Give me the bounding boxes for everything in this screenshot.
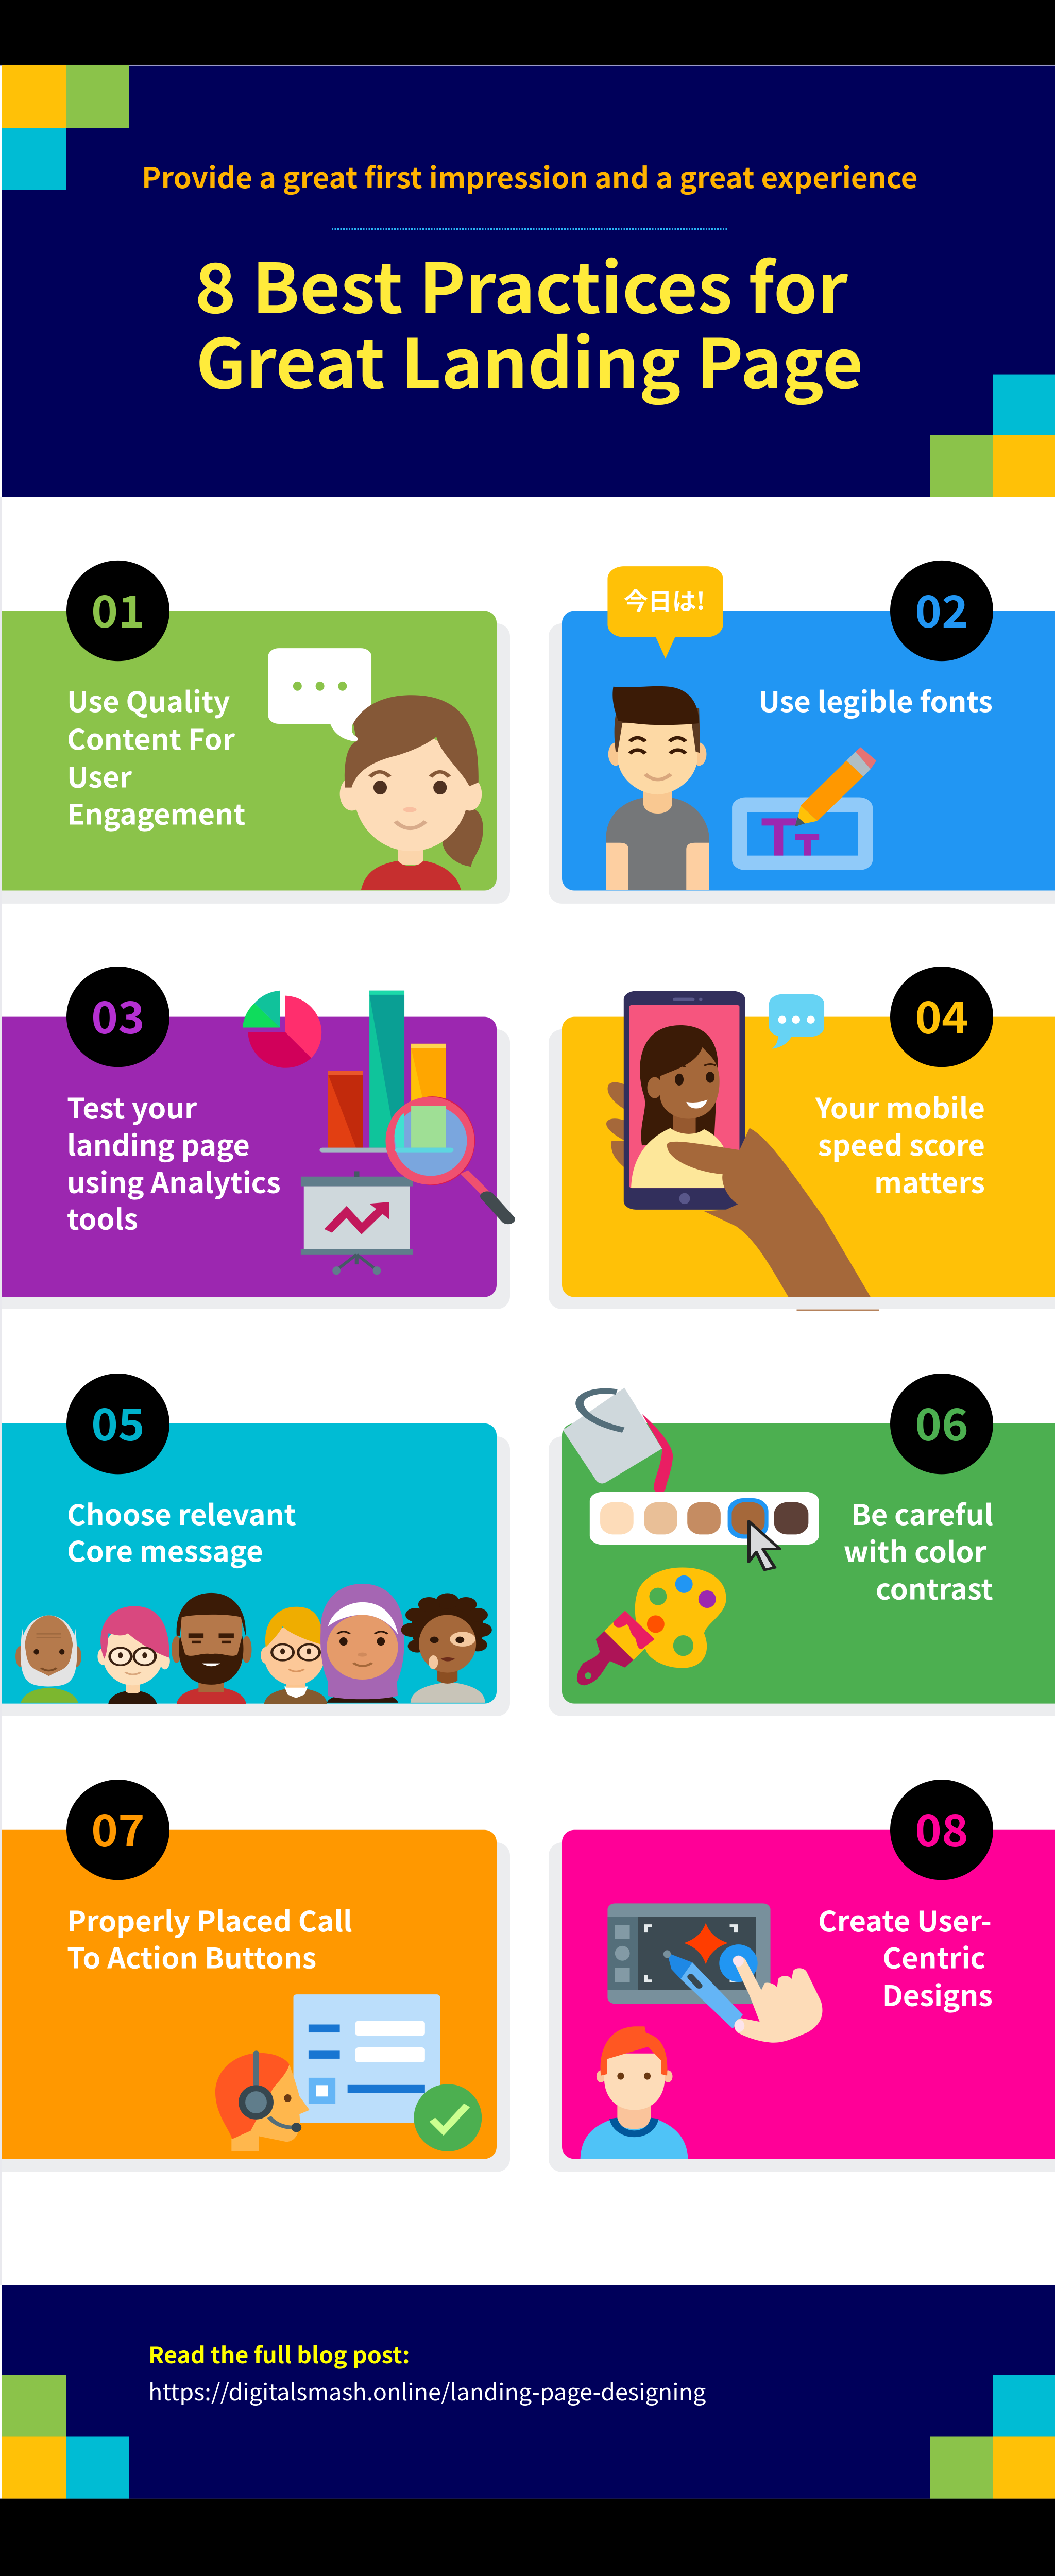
panel: 06 color contrast	[549, 1374, 1055, 1716]
illustration: charts, magnifier and board	[243, 991, 508, 1275]
text: test your landing page: Test your	[67, 1086, 197, 1127]
number badge 03: 03	[91, 982, 145, 1047]
number badge 06: 06	[915, 1389, 968, 1454]
illustration: row of diverse people	[15, 1584, 492, 1704]
number badge 01	[66, 561, 169, 661]
text: use quality content: Content For	[67, 717, 235, 758]
footer heading: Read the full blog post:	[148, 2337, 410, 2370]
number badge 07	[66, 1780, 169, 1880]
number badge 08: 08	[915, 1795, 968, 1860]
footer banner	[2, 2285, 1055, 2499]
text: user-centric designs: Centric	[882, 1936, 985, 1976]
number badge 04: 04	[915, 982, 968, 1047]
number badge 01: 01	[91, 577, 145, 640]
text: core message: Choose relevant	[67, 1493, 296, 1533]
title: Great Landing Page	[196, 309, 863, 408]
panel: 04 mobile speed	[549, 967, 1055, 1311]
number badge 02	[890, 561, 993, 661]
text: test your landing page: tools	[67, 1197, 138, 1238]
text: careful with color contrast: contrast	[876, 1567, 993, 1607]
text: call to action: To Action Buttons	[67, 1936, 316, 1976]
text: use quality content: User	[67, 755, 132, 795]
footer link: https://digitalsmash.online/landing-page-designing	[148, 2374, 706, 2407]
text: test your landing page: using Analytics	[67, 1160, 281, 1201]
number badge 05: 05	[91, 1389, 145, 1454]
text: mobile speed score: Your mobile	[815, 1086, 985, 1127]
number badge 05	[66, 1374, 169, 1474]
number badge 04	[890, 967, 993, 1067]
header banner	[0, 65, 1055, 497]
panel: 08 user-centric designs	[549, 1780, 1055, 2172]
text: user-centric designs: Designs	[882, 1973, 993, 2014]
illustration: man, speech bubble and pencil: 今日は!	[624, 583, 705, 617]
panel: 02 legible fonts	[549, 561, 1055, 904]
number badge 08	[890, 1780, 993, 1880]
panel: 05 core message	[2, 1374, 510, 1716]
illustration: tablet, stylus, hand and man	[581, 1903, 822, 2159]
panel: 07 call to action	[2, 1780, 510, 2172]
number badge 07: 07	[91, 1795, 145, 1860]
panel: 01 quality content	[2, 561, 510, 904]
text: core message: Core message	[67, 1529, 263, 1570]
illustration: hand holding phone	[606, 991, 879, 1311]
subtitle: Provide a great first impression and a great experience	[142, 156, 918, 197]
text: use quality content: Engagement	[67, 792, 245, 833]
illustration: form, check mark and headset agent	[215, 1994, 482, 2151]
text: mobile speed score: speed score	[818, 1123, 985, 1164]
panel: 03 analytics tools	[2, 967, 510, 1309]
text: use legible fonts: Use legible fonts	[758, 680, 993, 720]
number badge 02: 02	[915, 577, 968, 640]
text: careful with color contrast: Be careful	[852, 1493, 993, 1533]
title: 8 Best Practices for	[195, 233, 848, 333]
illustration: paint bucket, swatches, palette and brush	[563, 1388, 819, 1685]
number badge 06	[890, 1374, 993, 1474]
text: mobile speed score: matters	[874, 1160, 985, 1201]
text: careful with color contrast: with color	[844, 1530, 987, 1570]
illustration: woman with speech bubble	[268, 648, 483, 890]
number badge 03	[66, 967, 169, 1067]
illustration: man, speech bubble and pencil	[606, 566, 876, 890]
text: test your landing page: landing page	[67, 1123, 250, 1164]
text: use quality content: Use Quality	[67, 680, 230, 720]
text: call to action: Properly Placed Call	[67, 1899, 352, 1940]
dotted divider	[332, 228, 727, 230]
text: user-centric designs: Create User-	[818, 1899, 992, 1940]
